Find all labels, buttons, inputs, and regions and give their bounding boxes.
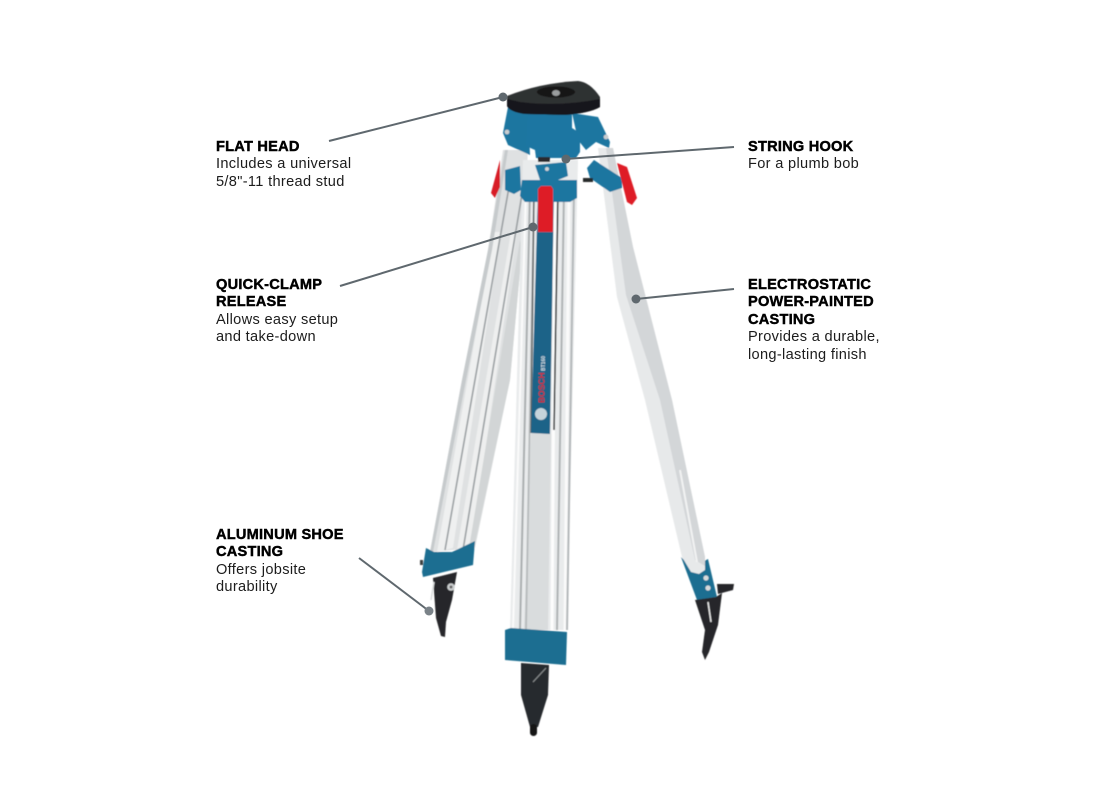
collar left arm (505, 166, 521, 194)
callout: aluminum shoe casting: ALUMINUM SHOE (216, 527, 344, 543)
callout: electrostatic casting (748, 277, 880, 363)
bottom clamp (505, 628, 567, 665)
red clamp center (538, 186, 553, 232)
blue center rail with logo (531, 190, 554, 434)
callout: aluminum shoe casting: Offers jobsite (216, 562, 306, 578)
callout: aluminum shoe casting: durability (216, 579, 278, 595)
leader: quick-clamp release (340, 222, 538, 286)
callout: electrostatic casting: CASTING (748, 312, 815, 328)
red clamp left (491, 160, 500, 198)
callout: electrostatic casting: Provides a durable, (748, 329, 880, 345)
leader: electrostatic casting (632, 289, 734, 304)
rail logo (535, 408, 547, 420)
flat head plate (507, 81, 600, 115)
string hook bracket (535, 162, 568, 180)
right leg (598, 148, 734, 660)
callout: quick-clamp release: RELEASE (216, 294, 286, 310)
callout: flat head: FLAT HEAD (216, 139, 300, 155)
center leg (505, 160, 578, 736)
callout: flat head: 5/8"-11 thread stud (216, 174, 345, 190)
right hinge (572, 113, 610, 150)
collar right arm (587, 160, 622, 192)
callout: flat head (216, 139, 351, 190)
leader: flat head (329, 92, 508, 141)
collar (520, 180, 577, 202)
left leg clamp and shoe (420, 541, 475, 637)
callout: quick-clamp release: and take-down (216, 329, 316, 345)
center block (526, 108, 580, 158)
left hinge (503, 107, 530, 155)
callout: electrostatic casting: ELECTROSTATIC (748, 277, 871, 293)
callout: electrostatic casting: POWER-PAINTED (748, 294, 874, 310)
rail model text: BT160 (541, 356, 547, 371)
callout: string hook: For a plumb bob (748, 156, 859, 172)
leader: aluminum shoe (359, 558, 434, 616)
callout: string hook (748, 139, 859, 172)
left leg (420, 150, 528, 637)
head assembly (491, 81, 637, 232)
right leg shoe (695, 584, 734, 660)
callout: quick-clamp release: Allows easy setup (216, 312, 338, 328)
right leg clamp (681, 557, 717, 600)
callout: flat head: Includes a universal (216, 156, 351, 172)
red clamp right (617, 163, 637, 205)
callout: electrostatic casting: long-lasting finish (748, 347, 867, 363)
callout: string hook: STRING HOOK (748, 139, 853, 155)
leader: string hook (562, 147, 734, 164)
callout: quick-clamp release (216, 277, 338, 345)
center shoe (521, 663, 549, 727)
callout: aluminum shoe casting: CASTING (216, 544, 283, 560)
callout: quick-clamp release: QUICK-CLAMP (216, 277, 322, 293)
callout: aluminum shoe casting (216, 527, 344, 595)
rail brand text: BOSCH (536, 372, 546, 403)
